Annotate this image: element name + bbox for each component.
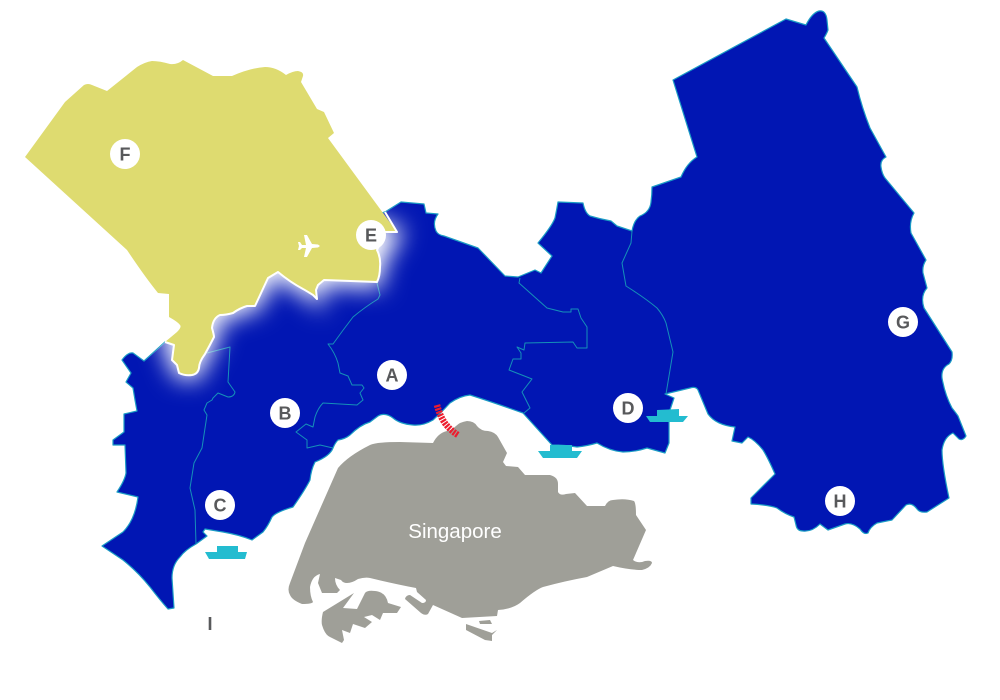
marker E: E [365, 226, 377, 246]
marker F: F [120, 144, 130, 164]
Singapore landmass [288, 421, 652, 643]
marker C: C [214, 496, 226, 516]
marker B [270, 398, 300, 428]
marker A [377, 360, 407, 390]
label I: I [207, 614, 213, 634]
marker G: G [896, 312, 910, 332]
icon: ferry D [646, 409, 688, 422]
marker H [825, 486, 855, 516]
icon: ferry middle [538, 445, 582, 458]
marker D [613, 393, 643, 423]
region F: white south border [165, 212, 397, 375]
region F: yellow [25, 60, 397, 375]
marker H: H [834, 492, 846, 512]
marker B: B [278, 404, 292, 424]
marker A: A [386, 366, 398, 386]
region outline: A B C D G H [102, 11, 966, 609]
icon: ferry C [205, 546, 247, 559]
bridge: red causeway [437, 405, 458, 435]
white glow along airport region border [165, 200, 397, 375]
icon: airplane [298, 235, 320, 257]
marker C [205, 490, 235, 520]
marker E [356, 220, 386, 250]
marker F [110, 139, 140, 169]
map: blue regions [102, 11, 966, 609]
label: Singapore: Singapore [408, 520, 502, 543]
marker D: D [622, 398, 634, 418]
marker G [888, 307, 918, 337]
